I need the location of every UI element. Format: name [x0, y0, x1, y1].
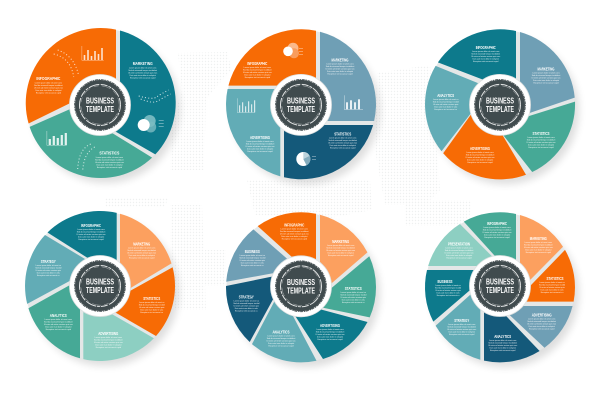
- icon: bar chart: [344, 95, 363, 110]
- segment: presentation: Duis aute irure dolor in voluptat: [446, 254, 473, 257]
- segment: infographic: [26, 28, 116, 124]
- segment: advertising: Duis aute irure dolor in voluptat: [247, 147, 274, 150]
- segment: marketing: [120, 214, 172, 294]
- segment: advertising: Sed do eiusmod tempor incididunt: [466, 153, 495, 156]
- segment: infographic: [48, 211, 117, 276]
- segment: statistics: Excepteur sint occaecat cupid: [97, 166, 122, 169]
- segment: statistics: Excepteur sint occaecat cu: [541, 291, 563, 294]
- segment: advertising: Excepteur sint occaecat cupid: [317, 338, 343, 341]
- segment: business: Lorem ipsum dolor sit amet co: [240, 254, 265, 257]
- segment: infographic: Duis aute irure dolor in voluptat: [78, 236, 105, 238]
- segment: analytics: Ut enim ad minim veniam quis nos: [267, 339, 295, 342]
- segment: analytics: Excepteur sint occaecat cupid: [490, 349, 515, 352]
- segment: business: Excepteur sint occaecat cu: [241, 264, 264, 267]
- segment: marketing: Lorem ipsum dolor sit amet cons: [326, 62, 354, 65]
- icon: overlapping circles: [283, 43, 303, 58]
- segment: strategy: STRATEGY: [41, 259, 56, 264]
- segment: infographic: Sed do eiusmod tempor incididunt: [34, 84, 63, 87]
- segment: statistics: Sed do eiusmod tempor incididunt: [527, 138, 556, 141]
- segment: marketing: Excepteur sint occaecat cupid: [328, 254, 353, 257]
- segment: infographic: Excepteur sint occaecat cupid: [36, 92, 61, 94]
- segment: advertising: ADVERTISING: [250, 135, 270, 140]
- segment: statistics: Lorem ipsum dolor sit amet co: [139, 301, 164, 304]
- segment: statistics: Ut enim ad minim veniam quis nos: [527, 141, 555, 144]
- segment: analytics: ANALYTICS: [494, 334, 511, 339]
- infographic 6: eight segments: [425, 212, 579, 367]
- segment: statistics: [110, 267, 175, 336]
- segment: statistics: [311, 256, 376, 317]
- segment: analytics: Sed do eiusmod tempor incididunt: [44, 320, 73, 324]
- segment: infographic: Duis aute irure dolor in voluptat: [484, 233, 511, 236]
- segment: marketing: Lorem ipsum dolor sit amet cons: [128, 246, 155, 250]
- segment: marketing: Excepteur sint occaecat cupid: [327, 72, 353, 75]
- dotted world map background: [105, 52, 472, 310]
- segment: infographic: INFOGRAPHIC: [476, 45, 496, 50]
- segment: analytics: ANALYTICS: [272, 329, 290, 334]
- segment: infographic: Excepteur sint occaecat cupid: [78, 238, 104, 241]
- segment: statistics: Excepteur sint occaecat cupid: [330, 146, 355, 149]
- segment: infographic: INFOGRAPHIC: [247, 61, 268, 66]
- segment: business: [425, 270, 485, 322]
- segment: strategy: Duis aute irure dolor in volu: [235, 307, 258, 310]
- segment: marketing: Ut enim ad minim veniam quis nos: [524, 246, 553, 249]
- hub: BUSINESS: [287, 96, 315, 105]
- hub: [270, 256, 332, 317]
- segment: analytics: [484, 293, 540, 362]
- hub: BUSINESS: [287, 278, 315, 287]
- icon: pie chart: [296, 152, 316, 166]
- hub: BUSINESS: [86, 278, 114, 286]
- icon: bar chart: [47, 131, 67, 145]
- segment: statistics: Ut enim ad minim veniam quis: [341, 296, 366, 299]
- segment: analytics: Sed do eiusmod tempor incididunt: [488, 341, 517, 344]
- segment: analytics: Ut enim ad minim veniam quis nos: [488, 344, 517, 347]
- segment: statistics: STATISTICS: [143, 296, 160, 301]
- segment: strategy: Excepteur sint occaecat cu: [37, 274, 60, 277]
- segment: business: Sed do eiusmod tempor incidid: [435, 286, 461, 289]
- segment: statistics: Excepteur sint occaecat cupid: [528, 146, 554, 149]
- segment: strategy: Lorem ipsum dolor sit amet cons: [448, 323, 475, 326]
- segment: marketing: Sed do eiusmod tempor incididunt: [128, 69, 157, 72]
- segment: infographic: INFOGRAPHIC: [487, 221, 508, 226]
- segment: statistics: Ut enim ad minim veniam quis nos: [95, 161, 124, 164]
- segment: business: Ut enim ad minim veniam quis: [435, 289, 461, 292]
- segment: strategy: STRATEGY: [454, 318, 469, 323]
- segment: advertising: Duis aute irure dolor in voluptat: [529, 325, 555, 328]
- segment: analytics: Lorem ipsum dolor sit amet cons: [489, 339, 516, 342]
- segment: presentation: Sed do eiusmod tempor incididunt: [445, 249, 474, 252]
- segment: strategy: Duis aute irure dolor in voluptat: [449, 330, 475, 333]
- segment: advertising: Lorem ipsum dolor sit amet cons: [528, 317, 555, 320]
- segment: marketing: Duis aute irure dolor in voluptat: [525, 248, 552, 251]
- segment: marketing: Lorem ipsum dolor sit amet cons: [525, 241, 552, 244]
- segment: marketing: Ut enim ad minim veniam quis nos: [128, 72, 157, 74]
- segment: infographic: Excepteur sint occaecat cupid: [282, 237, 307, 240]
- icon: bar chart: [237, 98, 255, 113]
- segment: infographic: Ut enim ad minim veniam quis nos: [483, 231, 511, 234]
- segment: presentation: PRESENTATION: [448, 241, 470, 246]
- segment: marketing: Excepteur sint occaecat cupid: [129, 256, 154, 260]
- segment: infographic: Duis aute irure dolor in voluptat: [35, 89, 62, 92]
- segment: strategy: [25, 235, 95, 304]
- segment: statistics: Excepteur sint occaecat cu: [140, 311, 163, 314]
- segment: infographic: [258, 212, 316, 279]
- segment: marketing: Excepteur sint occaecat cupid: [130, 76, 155, 80]
- segment: marketing: MARKETING: [530, 236, 547, 241]
- segment: advertising: ADVERTISING: [320, 323, 340, 328]
- dotted arc: [78, 144, 95, 171]
- segment: marketing: MARKETING: [133, 61, 153, 66]
- segment: infographic: Sed do eiusmod tempor incididunt: [471, 52, 500, 55]
- segment: infographic: Sed do eiusmod tempor incididunt: [243, 68, 272, 71]
- segment: marketing: MARKETING: [332, 57, 349, 62]
- segment: presentation: Lorem ipsum dolor sit amet cons: [445, 246, 473, 249]
- segment: infographic: INFOGRAPHIC: [81, 223, 102, 228]
- segment: advertising: [443, 102, 526, 179]
- segment: statistics: Sed do eiusmod tempor incididunt: [95, 158, 124, 162]
- segment: infographic: Ut enim ad minim veniam quis nos: [471, 55, 500, 58]
- segment: advertising: Sed do eiusmod tempor incididunt: [527, 320, 556, 323]
- segment: marketing: Ut enim ad minim veniam quis nos: [326, 249, 355, 252]
- segment: analytics: Duis aute irure dolor in voluptat: [490, 346, 516, 349]
- segment: infographic: Lorem ipsum dolor sit amet cons: [35, 82, 62, 84]
- segment: marketing: MARKETING: [538, 66, 555, 71]
- segment: infographic: Lorem ipsum dolor sit amet cons: [77, 228, 105, 231]
- segment: marketing: Lorem ipsum dolor sit amet cons: [532, 71, 560, 74]
- segment: marketing: Duis aute irure dolor in voluptat: [327, 70, 354, 73]
- segment: presentation: Excepteur sint occaecat cupid: [446, 256, 472, 259]
- segment: advertising: Excepteur sint occaecat cupid: [467, 161, 493, 164]
- segment: statistics: Ut enim ad minim veniam quis: [539, 286, 565, 289]
- segment: statistics: [30, 100, 152, 178]
- hub: TEMPLATE: [486, 286, 514, 295]
- segment: infographic: INFOGRAPHIC: [284, 222, 305, 227]
- segment: marketing: Ut enim ad minim veniam quis nos: [326, 67, 354, 70]
- segment: advertising: ADVERTISING: [532, 312, 552, 317]
- segment: statistics: Sed do eiusmod tempor incidid: [539, 283, 565, 286]
- segment: marketing: Excepteur sint occaecat cupid: [526, 251, 551, 254]
- segment: business: BUSINESS: [438, 279, 453, 284]
- segment: analytics: Lorem ipsum dolor sit amet cons: [267, 334, 295, 337]
- segment: strategy: Sed do eiusmod tempor incidid: [35, 266, 61, 270]
- segment: advertising: Sed do eiusmod tempor incididunt: [246, 142, 275, 145]
- segment: advertising: [500, 306, 573, 348]
- segment: analytics: Ut enim ad minim veniam quis: [433, 103, 458, 106]
- segment: statistics: Lorem ipsum dolor sit amet cons: [329, 136, 356, 139]
- segment: business: Ut enim ad minim veniam quis: [240, 259, 265, 262]
- segment: strategy: Excepteur sint occaecat cu: [235, 309, 258, 312]
- segment: advertising: Excepteur sint occaecat cupid: [529, 327, 554, 330]
- segment: marketing: Duis aute irure dolor in voluptat: [130, 74, 156, 77]
- segment: marketing: Sed do eiusmod tempor incididunt: [326, 246, 355, 249]
- segment: advertising: [295, 304, 368, 359]
- segment: presentation: [428, 224, 495, 266]
- segment: marketing: [520, 32, 575, 116]
- segment: marketing: Sed do eiusmod tempor incididunt: [326, 65, 355, 68]
- segment: marketing: Sed do eiusmod tempor incididunt: [532, 74, 561, 77]
- segment: marketing: Lorem ipsum dolor sit amet cons: [327, 244, 354, 247]
- segment: infographic: INFOGRAPHIC: [36, 76, 61, 81]
- hub: [470, 255, 530, 316]
- segment: marketing: Sed do eiusmod tempor incididunt: [127, 249, 156, 252]
- hub: BUSINESS: [486, 277, 514, 286]
- segment: infographic: Excepteur sint occaecat cupid: [245, 76, 270, 79]
- segment: advertising: [83, 301, 154, 361]
- segment: infographic: Lorem ipsum dolor sit amet cons: [281, 227, 308, 230]
- segment: business: Duis aute irure dolor in volu: [436, 291, 460, 294]
- hub: BUSINESS: [86, 96, 114, 106]
- segment: advertising: ADVERTISING: [470, 146, 490, 151]
- segment: business: Lorem ipsum dolor sit amet co: [435, 284, 461, 287]
- segment: strategy: [436, 286, 480, 360]
- segment: business: Excepteur sint occaecat cu: [437, 294, 459, 297]
- segment: infographic: Ut enim ad minim veniam quis nos: [280, 232, 309, 235]
- infographic 3: five segments: [425, 29, 579, 184]
- segment: infographic: Sed do eiusmod tempor incididunt: [280, 230, 309, 233]
- segment: advertising: Lorem ipsum dolor sit amet cons: [316, 328, 344, 331]
- segment: strategy: Sed do eiusmod tempor incidid: [233, 302, 259, 305]
- segment: advertising: Sed do eiusmod tempor incididunt: [94, 338, 123, 342]
- segment: strategy: Lorem ipsum dolor sit amet co: [36, 264, 61, 267]
- segment: analytics: Sed do eiusmod tempor incididunt: [267, 337, 296, 340]
- hub: TEMPLATE: [486, 105, 514, 114]
- segment: marketing: Duis aute irure dolor in voluptat: [533, 79, 560, 82]
- segment: advertising: ADVERTISING: [98, 331, 119, 336]
- segment: marketing: Excepteur sint occaecat cupid: [533, 81, 559, 84]
- hub: BUSINESS: [486, 96, 514, 105]
- segment: advertising: Lorem ipsum dolor sit amet cons: [246, 140, 274, 143]
- segment: strategy: Ut enim ad minim veniam quis: [36, 269, 61, 272]
- segment: analytics: Sed do eiusmod tempor incidid: [433, 100, 459, 103]
- segment: analytics: Excepteur sint occaecat cupid: [268, 344, 294, 347]
- segment: infographic: Duis aute irure dolor in voluptat: [473, 57, 499, 60]
- segment: business: [226, 229, 296, 282]
- segment: marketing: Ut enim ad minim veniam quis nos: [532, 76, 560, 79]
- segment: statistics: Sed do eiusmod tempor incidid: [139, 304, 165, 306]
- segment: analytics: Ut enim ad minim veniam quis nos: [44, 323, 73, 326]
- segment: statistics: Duis aute irure dolor in volu: [540, 288, 564, 291]
- segment: marketing: [101, 30, 176, 154]
- segment: advertising: Excepteur sint occaecat cupid: [96, 346, 121, 349]
- segment: statistics: Lorem ipsum dolor sit amet cons: [96, 156, 123, 159]
- segment: infographic: Ut enim ad minim veniam quis nos: [34, 86, 63, 90]
- segment: marketing: [520, 215, 563, 290]
- segment: analytics: Lorem ipsum dolor sit amet co: [433, 98, 458, 101]
- segment: statistics: Lorem ipsum dolor sit amet co: [539, 281, 565, 284]
- hub: [470, 74, 530, 135]
- segment: analytics: Duis aute irure dolor in voluptat: [45, 326, 72, 328]
- icon: bar chart: [82, 46, 104, 60]
- segment: statistics: Duis aute irure dolor in volu: [342, 298, 365, 301]
- segment: marketing: MARKETING: [332, 239, 350, 244]
- segment: analytics: [28, 279, 80, 358]
- segment: advertising: Duis aute irure dolor in voluptat: [467, 158, 494, 161]
- segment: marketing: Duis aute irure dolor in voluptat: [129, 254, 155, 257]
- segment: advertising: Ut enim ad minim veniam quis nos: [316, 333, 344, 336]
- segment: infographic: Duis aute irure dolor in voluptat: [281, 235, 308, 238]
- segment: strategy: Duis aute irure dolor in volu: [37, 272, 60, 274]
- hub: TEMPLATE: [287, 105, 315, 114]
- segment: infographic: Ut enim ad minim veniam quis nos: [243, 71, 272, 74]
- segment: advertising: Lorem ipsum dolor sit amet cons: [466, 151, 494, 154]
- segment: analytics: Lorem ipsum dolor sit amet cons: [45, 318, 72, 321]
- segment: statistics: [515, 250, 575, 302]
- segment: infographic: Lorem ipsum dolor sit amet cons: [244, 66, 271, 69]
- infographic 4: six segments: [25, 211, 179, 366]
- hub: [70, 256, 130, 316]
- segment: analytics: Duis aute irure dolor in volu: [434, 105, 457, 108]
- segment: presentation: Ut enim ad minim veniam quis nos: [445, 251, 473, 254]
- segment: infographic: Excepteur sint occaecat cupid: [473, 60, 498, 63]
- segment: marketing: Duis aute irure dolor in voluptat: [328, 251, 354, 254]
- segment: strategy: Ut enim ad minim veniam quis: [234, 304, 259, 307]
- segment: analytics: [252, 289, 316, 362]
- segment: statistics: [503, 102, 575, 172]
- segment: analytics: [425, 66, 490, 151]
- segment: statistics: Duis aute irure dolor in voluptat: [330, 144, 356, 147]
- segment: advertising: Sed do eiusmod tempor incididunt: [316, 330, 345, 333]
- segment: strategy: Sed do eiusmod tempor incididunt: [447, 325, 476, 328]
- segment: strategy: Lorem ipsum dolor sit amet co: [234, 299, 259, 302]
- segment: marketing: MARKETING: [133, 242, 151, 246]
- segment: advertising: Ut enim ad minim veniam quis nos: [527, 322, 556, 325]
- segment: statistics: Excepteur sint occaecat cu: [342, 301, 365, 304]
- segment: advertising: [226, 89, 280, 176]
- segment: marketing: Lorem ipsum dolor sit amet cons: [129, 66, 156, 70]
- segment: advertising: Ut enim ad minim veniam quis nos: [94, 341, 123, 344]
- segment: statistics: STATISTICS: [546, 276, 564, 281]
- segment: infographic: Excepteur sint occaecat cupid: [484, 236, 510, 239]
- segment: statistics: Lorem ipsum dolor sit amet co: [341, 291, 366, 294]
- segment: statistics: Sed do eiusmod tempor incididunt: [328, 139, 357, 142]
- infographic 2: four segments: [226, 29, 380, 184]
- segment: marketing: Sed do eiusmod tempor incididunt: [524, 243, 553, 246]
- segment: statistics: STATISTICS: [334, 131, 351, 136]
- segment: analytics: ANALYTICS: [437, 93, 454, 98]
- dotted zigzag: [139, 90, 171, 102]
- segment: advertising: Excepteur sint occaecat cupid: [247, 150, 273, 153]
- segment: statistics: STATISTICS: [345, 286, 362, 291]
- hub: TEMPLATE: [86, 105, 114, 114]
- segment: statistics: Ut enim ad minim veniam quis nos: [328, 141, 357, 144]
- segment: analytics: Excepteur sint occaecat cu: [434, 108, 457, 111]
- icon: overlapping circles: [138, 115, 164, 132]
- segment: statistics: Duis aute irure dolor in volu: [140, 308, 163, 312]
- segment: analytics: Duis aute irure dolor in voluptat: [268, 342, 295, 345]
- segment: statistics: Lorem ipsum dolor sit amet cons: [527, 136, 555, 139]
- segment: statistics: [284, 125, 373, 179]
- segment: business: Duis aute irure dolor in volu: [241, 261, 264, 264]
- segment: analytics: Excepteur sint occaecat cupid: [46, 328, 71, 331]
- segment: advertising: Ut enim ad minim veniam quis nos: [246, 145, 274, 148]
- hub: [70, 74, 130, 136]
- segment: statistics: Duis aute irure dolor in voluptat: [528, 143, 555, 146]
- segment: analytics: ANALYTICS: [50, 313, 67, 318]
- segment: strategy: Ut enim ad minim veniam quis nos: [447, 328, 476, 331]
- dotted arc: [54, 50, 79, 77]
- segment: strategy: STRATEGY: [239, 294, 254, 299]
- segment: strategy: [226, 275, 281, 342]
- infographic 1: three segments: [26, 28, 180, 183]
- hub: TEMPLATE: [86, 286, 114, 295]
- segment: marketing: [320, 32, 376, 121]
- segment: marketing: [320, 215, 367, 293]
- segment: infographic: [464, 212, 516, 279]
- segment: statistics: STATISTICS: [99, 150, 119, 156]
- hub: [270, 74, 332, 135]
- segment: infographic: Sed do eiusmod tempor incididunt: [77, 230, 106, 234]
- segment: advertising: Duis aute irure dolor in voluptat: [95, 344, 122, 346]
- segment: strategy: Excepteur sint occaecat cupid: [449, 333, 474, 336]
- segment: infographic: Duis aute irure dolor in voluptat: [244, 73, 271, 76]
- segment: statistics: Ut enim ad minim veniam quis: [139, 306, 164, 309]
- segment: marketing: Ut enim ad minim veniam quis nos: [127, 252, 156, 254]
- segment: advertising: Ut enim ad minim veniam quis nos: [466, 156, 494, 159]
- segment: infographic: Ut enim ad minim veniam quis nos: [77, 233, 105, 236]
- segment: business: Sed do eiusmod tempor incidid: [239, 256, 265, 259]
- segment: infographic: [438, 29, 516, 92]
- segment: infographic: [228, 29, 316, 86]
- segment: advertising: Duis aute irure dolor in voluptat: [317, 335, 344, 338]
- segment: business: BUSINESS: [245, 249, 260, 254]
- segment: statistics: Sed do eiusmod tempor incidid: [340, 293, 366, 296]
- segment: advertising: Lorem ipsum dolor sit amet cons: [95, 336, 122, 339]
- segment: statistics: Duis aute irure dolor in voluptat: [96, 164, 123, 166]
- segment: statistics: STATISTICS: [532, 131, 550, 136]
- segment: infographic: Lorem ipsum dolor sit amet cons: [483, 226, 511, 229]
- segment: infographic: Sed do eiusmod tempor incididunt: [483, 228, 512, 231]
- infographic 5: seven segments: [226, 212, 380, 367]
- hub: TEMPLATE: [287, 286, 315, 295]
- segment: infographic: Lorem ipsum dolor sit amet cons: [472, 50, 499, 53]
